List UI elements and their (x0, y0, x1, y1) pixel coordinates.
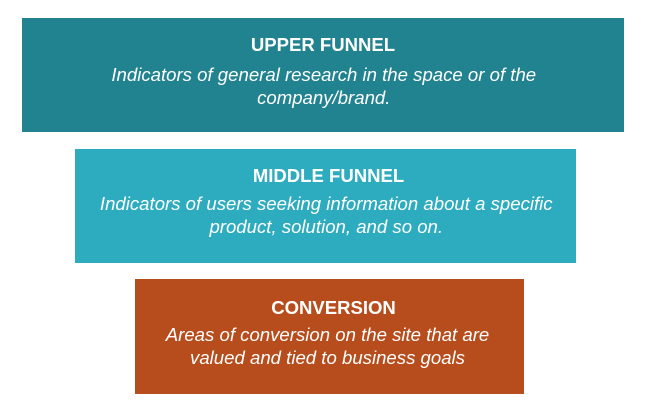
text: upper funnel description: Indicators of general research in the space or of the (111, 64, 536, 85)
text: conversion description: valued and tied to business goals (190, 347, 465, 368)
heading: conversion: CONVERSION (271, 297, 396, 318)
panel: conversion (135, 279, 524, 394)
text: middle funnel description (100, 193, 553, 237)
text: middle funnel description: Indicators of users seeking information about a specific (100, 193, 553, 214)
heading: middle funnel: MIDDLE FUNNEL (253, 165, 404, 186)
heading: upper funnel: UPPER FUNNEL (251, 34, 395, 55)
panel: upper funnel (22, 18, 624, 132)
text: upper funnel description: company/brand. (257, 87, 390, 108)
panel: middle funnel (75, 149, 576, 263)
text: conversion description (164, 324, 489, 368)
text: upper funnel description (111, 64, 536, 108)
text: conversion description: Areas of conversion on the site that are (166, 324, 489, 345)
text: middle funnel description: product, solution, and so on. (209, 216, 443, 237)
